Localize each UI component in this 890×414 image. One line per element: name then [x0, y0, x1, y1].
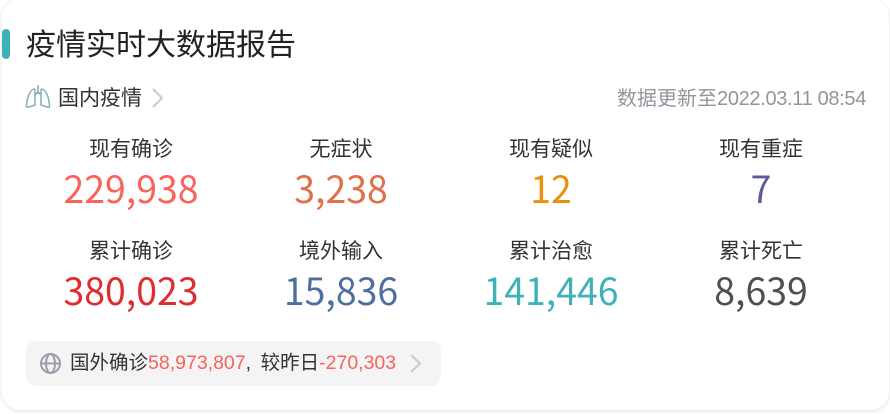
icon: globe — [40, 353, 61, 374]
stat: current confirmed: 229,938 — [64, 160, 198, 214]
stat: current severe — [719, 138, 803, 214]
title: 疫情实时大数据报告 — [26, 29, 296, 62]
stat: asymptomatic: 3,238 — [294, 160, 388, 214]
stat: total cured: 141,446 — [484, 262, 618, 316]
stat: asymptomatic: 无症状 — [310, 138, 372, 161]
stat: total confirmed: 380,023 — [64, 262, 198, 316]
stat: imported: 境外输入 — [299, 240, 383, 263]
stat: current severe: 7 — [751, 160, 771, 214]
stat: current suspected — [509, 138, 593, 214]
overseas text: 国外确诊58,973,807 较昨日-270,303 — [70, 352, 396, 374]
stat: total deaths: 8,639 — [714, 262, 808, 316]
stat: current severe: 现有重症 — [719, 138, 803, 161]
section heading: domestic: 国内疫情 — [58, 87, 142, 110]
panel: overseas summary — [26, 341, 441, 386]
icon: lungs — [26, 85, 50, 108]
overseas text: , — [246, 352, 251, 374]
stat: imported: 15,836 — [284, 262, 398, 316]
stat: current confirmed: 现有确诊 — [89, 138, 173, 161]
icon: chevron — [410, 354, 422, 373]
stat: total cured: 累计治愈 — [509, 240, 593, 263]
stat: total confirmed: 累计确诊 — [89, 240, 173, 263]
update time: 数据更新至2022.03.11 08:54 — [617, 88, 866, 110]
stat: current suspected: 12 — [530, 160, 572, 214]
stat: total deaths: 累计死亡 — [719, 240, 803, 263]
stat: current suspected: 现有疑似 — [509, 138, 593, 161]
title accent bar — [2, 29, 10, 59]
icon: chevron — [152, 88, 164, 108]
